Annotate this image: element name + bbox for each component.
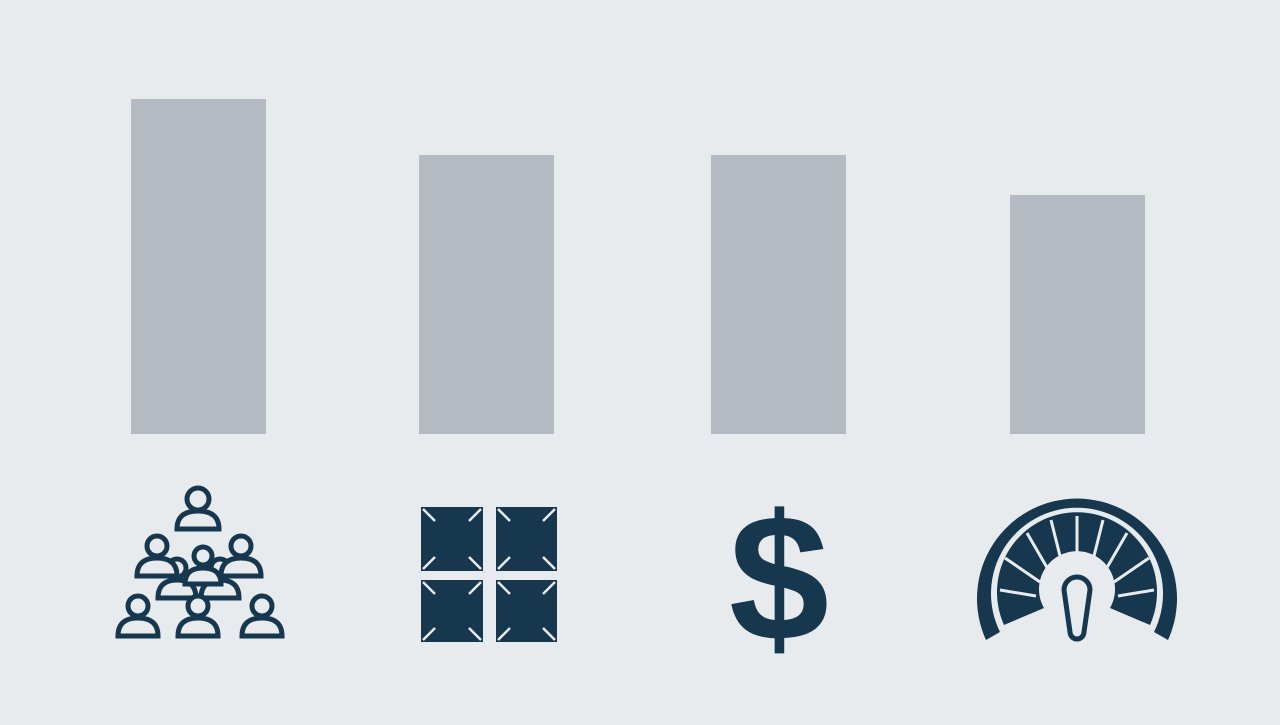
icon: dollar sign: $ [729, 478, 829, 679]
icon: group of people [118, 488, 282, 636]
icon: gauge [977, 499, 1177, 640]
bar 1 [131, 99, 266, 434]
bar 4 [1010, 195, 1145, 434]
bar 2 [419, 155, 554, 434]
bar 3 [711, 155, 846, 434]
icon: four squares grid [421, 507, 557, 642]
